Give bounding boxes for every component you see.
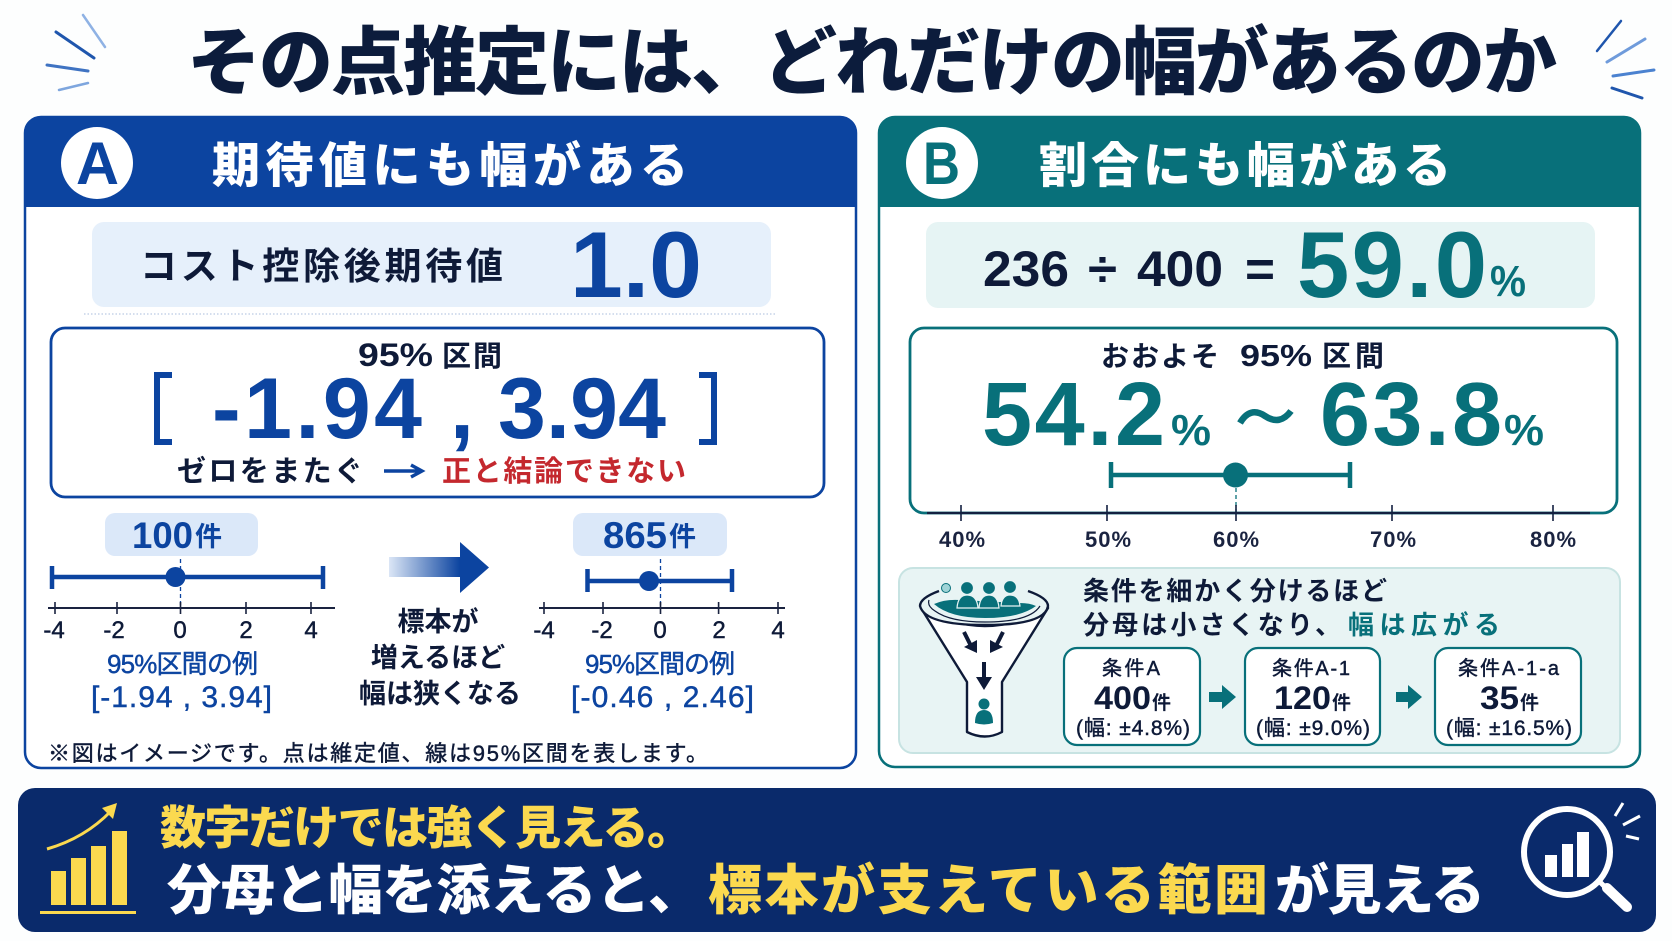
arrow: sample growth: 増えるほど: [371, 643, 505, 673]
icon: left sparkle rays: [47, 15, 105, 90]
arrow: A-1 to A-1-a: [1396, 685, 1422, 709]
arrow: sample growth: [359, 542, 521, 709]
100 samples interval chart: -2: [103, 617, 125, 644]
icon: funnel: [920, 580, 1048, 736]
865 samples interval chart: 0: [653, 617, 667, 644]
100 samples interval chart: 4: [304, 617, 318, 644]
card: condition A-1-a: 35: [1480, 680, 1519, 716]
proportion callout: 236: [983, 241, 1069, 297]
95% interval box: ゼロをまたぐ: [177, 455, 363, 488]
approx 95% interval box with scale: 95%: [1240, 338, 1312, 373]
95% interval box: [51, 328, 824, 497]
95% interval box: 正と結論できない: [442, 455, 686, 488]
panel B: proportion: [878, 117, 1641, 767]
card: condition A-1: 件: [1332, 692, 1351, 714]
card: condition A-1: 120: [1274, 680, 1331, 716]
865 samples interval chart: 4: [771, 617, 785, 644]
approx 95% interval box with scale: 63.8: [1320, 365, 1502, 465]
100 samples interval chart: 2: [239, 617, 253, 644]
865 samples interval chart: 95%区間の例: [585, 649, 735, 679]
card: condition A: 件: [1152, 692, 1171, 714]
proportion callout: 400: [1137, 241, 1223, 297]
865 samples interval chart: -4: [533, 617, 555, 644]
icon: right sparkle rays: [1597, 21, 1654, 98]
865 samples interval chart: 865: [603, 515, 667, 556]
card: condition A-1-a: [1435, 648, 1581, 745]
95% interval box: 95%: [358, 337, 433, 373]
arrow: A to A-1: [1209, 685, 1236, 709]
card: condition A-1: (幅: ±9.0%): [1256, 717, 1370, 740]
100 samples interval chart: 95%区間の例: [107, 649, 258, 679]
panel B header: 割合にも幅がある: [1039, 139, 1451, 193]
approx 95% interval box with scale: 区間: [1322, 341, 1384, 373]
card: condition A-1-a: 件: [1520, 692, 1539, 714]
panel A header: A: [76, 130, 119, 197]
message line 2: [167, 860, 1485, 921]
approx 95% interval box with scale: %: [1504, 406, 1544, 455]
100 samples interval chart: [-1.94 , 3.94]: [91, 681, 272, 714]
message line 2: 標本が支えている範囲: [708, 860, 1268, 921]
funnel explanation panel: [899, 568, 1620, 753]
panel B header: B: [923, 130, 960, 197]
95% interval box: 3.94: [498, 361, 666, 457]
arrow: sample growth: 幅は狭くなる: [359, 679, 521, 709]
865 samples interval chart: 2: [712, 617, 726, 644]
100 samples interval chart: 件: [195, 522, 222, 552]
card: condition A: 条件A: [1102, 657, 1161, 680]
approx 95% interval box with scale: %: [1171, 406, 1211, 455]
card: condition A: 400: [1094, 680, 1151, 716]
funnel explanation panel: 条件を細かく分けるほど: [1083, 576, 1387, 606]
footnote: ※図はイメージです。点は維定値、線は95%区間を表します。: [48, 741, 708, 766]
funnel explanation panel: 幅は広がる: [1348, 610, 1500, 640]
proportion callout: 59.0: [1297, 212, 1487, 317]
95% interval box: -1.94: [212, 361, 422, 457]
panel A: expected value: [24, 117, 857, 768]
approx 95% interval box with scale: 80%: [1530, 527, 1576, 552]
100 samples interval chart: 0: [173, 617, 187, 644]
expected value callout: [92, 212, 771, 317]
95% interval box: 区間: [442, 341, 502, 373]
title: その点推定には、どれだけの幅があるのか: [187, 21, 1557, 104]
approx 95% interval box with scale: 60%: [1213, 527, 1259, 552]
card: condition A-1: [1245, 648, 1380, 745]
865 samples interval chart: 件: [669, 522, 696, 552]
panel B header: [878, 117, 1641, 207]
100 samples interval chart: 100: [132, 515, 193, 556]
865 samples interval chart: -2: [591, 617, 613, 644]
proportion callout: %: [1490, 257, 1526, 306]
card: condition A: [1064, 648, 1200, 745]
icon: magnifier with bars: [1524, 803, 1640, 907]
approx 95% interval box with scale: [910, 328, 1617, 552]
proportion callout: ÷: [1088, 241, 1117, 297]
proportion callout: =: [1245, 241, 1275, 297]
approx 95% interval box with scale: おおよそ: [1101, 341, 1219, 372]
card: condition A: (幅: ±4.8%): [1076, 717, 1190, 740]
100 samples interval chart: -4: [43, 617, 65, 644]
icon: rising bar chart: [40, 803, 136, 914]
approx 95% interval box with scale: 50%: [1085, 527, 1131, 552]
card: condition A-1: 条件A-1: [1272, 657, 1350, 680]
865 samples interval chart: [-0.46 , 2.46]: [571, 681, 754, 714]
expected value callout: コスト控除後期待値: [140, 246, 503, 287]
funnel explanation panel: 分母は小さくなり、: [1083, 610, 1341, 640]
panel A header: 期待値にも幅がある: [212, 139, 688, 193]
approx 95% interval box with scale: 54.2: [982, 365, 1165, 465]
95% interval box: ,: [450, 361, 474, 457]
panel A header: [24, 117, 857, 207]
approx 95% interval box with scale: 70%: [1370, 527, 1416, 552]
arrow: sample growth: 標本が: [398, 606, 478, 637]
approx 95% interval box with scale: 40%: [939, 527, 985, 552]
message line 1: 数字だけでは強く見える。: [160, 802, 693, 854]
card: condition A-1-a: 条件A-1-a: [1458, 657, 1560, 680]
expected value callout: 1.0: [570, 212, 702, 317]
message line 2: 分母と幅を添えると、: [167, 861, 702, 921]
865 samples interval chart: [533, 513, 785, 714]
card: condition A-1-a: (幅: ±16.5%): [1446, 717, 1572, 740]
proportion callout: [926, 212, 1595, 317]
message line 2: が見える: [1275, 860, 1485, 921]
bottom banner: [18, 788, 1656, 932]
100 samples interval chart: [43, 513, 335, 714]
